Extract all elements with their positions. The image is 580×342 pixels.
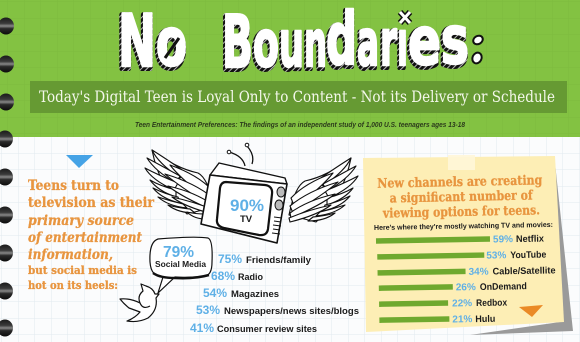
stat: consumer review sites: 41% <box>190 321 214 335</box>
left text block: television as their <box>28 195 155 211</box>
left text block: information, <box>28 247 113 263</box>
stat list <box>190 252 359 335</box>
title: r <box>380 7 397 81</box>
title: u <box>279 8 304 82</box>
stat: magazines: Magazines <box>231 289 279 300</box>
title: o <box>155 6 186 83</box>
stat: friends and family: Friends/family <box>246 255 312 266</box>
bar: Redbox: 22% <box>452 298 472 309</box>
title: e <box>407 5 440 82</box>
title: o <box>252 10 278 84</box>
title: u <box>278 10 303 84</box>
sticky note heading <box>377 173 543 222</box>
icon: blue triangle <box>66 155 93 168</box>
bar: Netflix: Netflix <box>516 234 545 245</box>
stat: radio: 68% <box>211 269 235 283</box>
bar: YouTube: YouTube <box>510 250 546 261</box>
TV percentage: TV <box>240 214 253 225</box>
icon: speech bubble <box>150 237 212 293</box>
bar: OnDemand: 26% <box>456 282 476 293</box>
bar: OnDemand: OnDemand <box>480 281 527 293</box>
bar: Hulu <box>379 314 496 327</box>
title: a <box>357 7 379 81</box>
bar: Redbox: Redbox <box>476 298 508 309</box>
icon: bird <box>120 284 159 322</box>
left text block: hot on its heels: <box>28 278 118 292</box>
sticky note heading: New channels are creating <box>377 173 542 192</box>
bar: Cable/Satellite <box>377 265 556 279</box>
sticky note heading: a significant number of <box>390 188 534 206</box>
icon: speech bubble: 79% <box>163 244 194 261</box>
title: a <box>356 9 378 83</box>
title: ı <box>397 7 408 80</box>
stat: newspapers <box>196 303 359 317</box>
bar: Redbox <box>379 298 508 311</box>
left text block <box>28 178 155 292</box>
spiral binding rings <box>0 18 14 336</box>
title: N <box>117 1 155 85</box>
stat: magazines: 54% <box>203 286 227 300</box>
bar chart <box>376 233 556 327</box>
title: N <box>118 0 156 83</box>
TV percentage: 90% <box>230 196 264 215</box>
stat: radio: Radio <box>238 272 263 283</box>
bar: Cable/Satellite: Cable/Satellite <box>492 265 556 277</box>
bar: Hulu: Hulu <box>475 314 496 325</box>
title <box>117 0 484 86</box>
stat: consumer review sites: Consumer review sites <box>217 324 317 335</box>
title: e <box>408 3 441 80</box>
stat: newspapers: 53% <box>196 303 220 317</box>
title: d <box>325 0 356 83</box>
bar: Cable/Satellite: 34% <box>468 267 489 278</box>
title: n <box>304 8 327 82</box>
stat: radio <box>211 269 263 283</box>
icon: right wing <box>289 158 358 222</box>
bar: YouTube <box>377 250 546 263</box>
title: B <box>221 2 252 86</box>
title: B <box>222 0 253 84</box>
left text block: of entertainment <box>28 230 143 246</box>
bar: Netflix <box>376 234 545 247</box>
study caption: Teen Entertainment Preferences: The findings of an independent study of 1,000 U.S. teenagers ages 13-18 <box>135 120 466 129</box>
stat: magazines <box>203 286 279 300</box>
stat: friends and family: 75% <box>218 252 242 266</box>
stat: friends and family <box>218 252 312 266</box>
icon: orange triangle <box>519 305 543 317</box>
title: n <box>303 10 326 84</box>
sticky note subheading: Here's where they're mostly watching TV and movies: <box>374 220 553 232</box>
left text block: primary source <box>28 213 134 229</box>
icon: left wing <box>145 150 214 219</box>
bar: Hulu: 21% <box>452 314 473 325</box>
sticky note heading: viewing options for teens. <box>382 203 540 222</box>
TV percentage <box>230 196 264 225</box>
title: ı <box>396 9 407 82</box>
left text block: Teens turn to <box>28 178 119 194</box>
title: o <box>253 8 279 82</box>
stat: newspapers: Newspapers/news sites/blogs <box>224 306 359 317</box>
stat: consumer review sites <box>190 321 317 335</box>
icon: winged television <box>201 143 287 243</box>
panel: sticky note <box>363 155 573 335</box>
green header panel <box>0 0 580 137</box>
icon: speech bubble: Social Media <box>155 260 207 269</box>
bar: Netflix: 59% <box>493 234 513 245</box>
title: o <box>156 4 187 81</box>
title: s <box>440 4 468 81</box>
bar: OnDemand <box>379 281 527 295</box>
title: r <box>379 9 396 83</box>
title: s <box>441 2 469 79</box>
left text block: but social media is <box>28 263 137 277</box>
bar: YouTube: 53% <box>486 250 506 262</box>
subtitle banner <box>30 81 567 113</box>
